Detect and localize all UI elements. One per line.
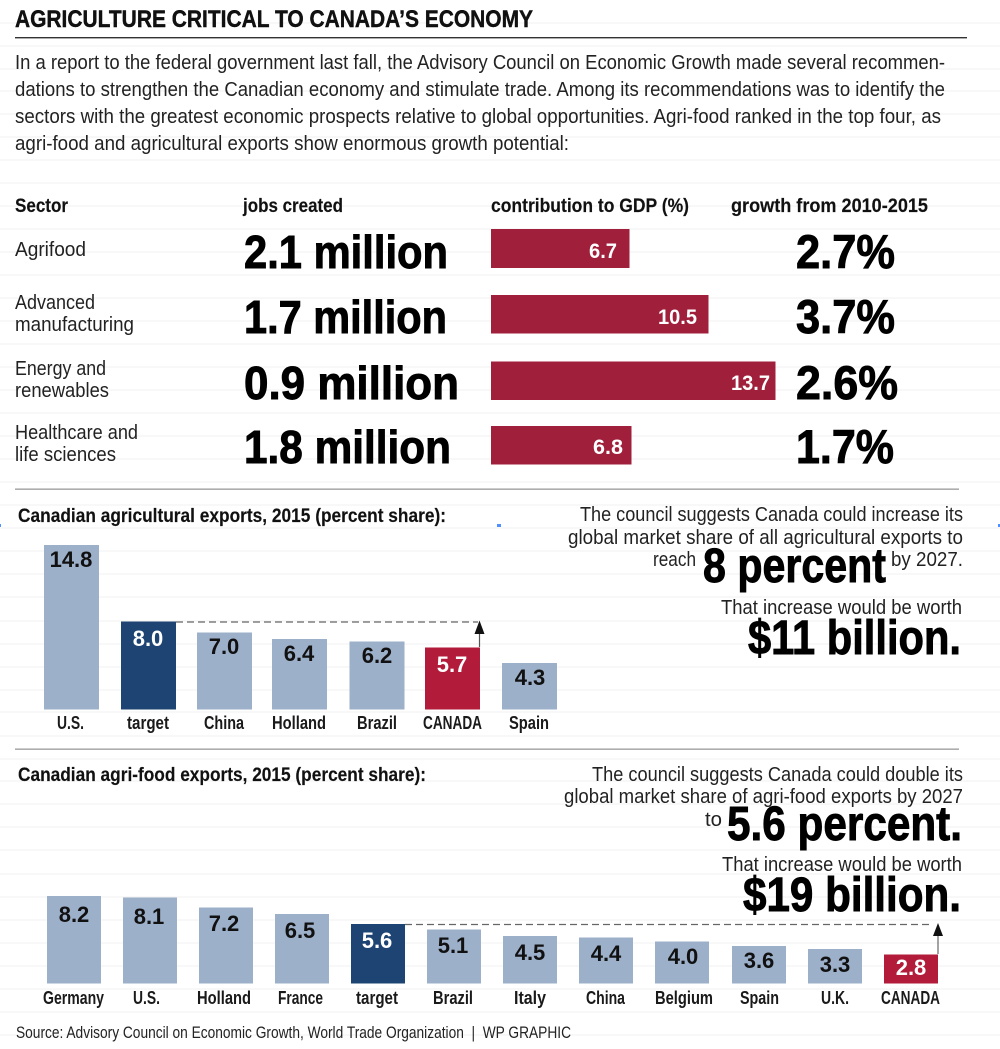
bar chart: agricultural exports: U.S. [57,713,84,733]
bar chart: agri-food exports: Belgium [655,988,713,1008]
bar chart: agricultural exports: Spain [509,713,549,733]
panel: agricultural exports [18,504,963,733]
bar chart: agri-food exports: 5.1 [438,933,468,958]
bar chart: agri-food exports: 2.8 [896,955,926,980]
bar chart: agricultural exports: Brazil [357,713,397,733]
panel: agri-food exports [18,764,963,1008]
callout: 8 percent: 8 percent [703,540,886,593]
bar chart: agricultural exports: 6.4 [284,641,315,666]
arrow: canada to target [176,620,484,647]
row: advanced manufacturing [15,290,895,343]
bar chart: agricultural exports: target [127,713,169,733]
intro text block: agri-food and agricultural exports show enormous growth potential: [15,133,569,155]
row: healthcare and life sciences: Healthcare and [15,422,138,444]
chart heading: Canadian agricultural exports, 2015 (percent share): [18,506,446,527]
callout: 8 percent: $11 billion. [748,612,961,665]
bar chart: agricultural exports: China [204,713,245,733]
row: energy and renewables: 13.7 [731,372,770,395]
bar chart: agri-food exports: 7.2 [209,911,239,936]
bar chart: agri-food exports: 6.5 [285,918,315,943]
bar chart: agri-food exports: Spain [740,988,779,1008]
row: energy and renewables: 0.9 million [244,357,459,409]
bar chart: agri-food exports: 8.1 [134,904,164,929]
callout: 8 percent: That increase would be worth [721,597,962,619]
source line: Source: Advisory Council on Economic Growth, World Trade Organization | WP GRAPHIC [16,1023,571,1042]
row: energy and renewables: 2.6% [796,356,898,409]
bar chart: agri-food exports: U.S. [133,988,160,1008]
row: agrifood: Agrifood [15,239,86,261]
row: advanced manufacturing: 3.7% [796,290,895,343]
bar chart: agricultural exports [44,545,557,733]
bar chart: agricultural exports: 4.3 [515,665,545,690]
bar chart: agri-food exports: U.K. [821,988,849,1008]
arrow: canada to target [405,923,943,954]
table column headings: contribution to GDP (%) [491,196,689,217]
chart heading: Canadian agri-food exports, 2015 (percent share): [18,765,426,786]
intro text block: In a report to the federal government last fall, the Advisory Council on Economic Growth made several recommen- [15,52,945,74]
row: energy and renewables [15,356,898,409]
row: advanced manufacturing: 10.5 [658,306,697,329]
intro text block [15,52,945,155]
table column headings: jobs created [242,196,343,217]
table column headings [15,196,928,217]
table column headings: growth from 2010-2015 [731,196,928,217]
callout: 5.6 percent [564,764,963,922]
row: agrifood [15,225,895,278]
table column headings: Sector [15,196,69,217]
bar chart: agri-food exports [43,896,940,1008]
callout: 5.6 percent: $19 billion. [743,869,961,922]
row: healthcare and life sciences: 1.8 million [244,421,451,473]
bar chart: agri-food exports: 4.0 [668,944,698,969]
row: agrifood: 6.7 [589,240,617,263]
intro text block: dations to strengthen the Canadian economy and stimulate trade. Among its recommendations was to identify the [15,79,945,101]
row: healthcare and life sciences: 6.8 [593,436,623,459]
bar chart: agri-food exports: France [278,988,323,1008]
bar chart: agri-food exports: Holland [197,988,251,1008]
bar chart: agri-food exports: CANADA [881,988,940,1008]
bar chart: agri-food exports: Italy [514,988,546,1008]
callout: 5.6 percent: 5.6 percent. [727,798,962,851]
bar chart: agricultural exports: 14.8 [50,547,92,572]
panel: sector table [15,196,928,473]
row: advanced manufacturing: Advanced [15,292,95,314]
bar chart: agricultural exports: Holland [272,713,326,733]
bar chart: agri-food exports: China [586,988,626,1008]
callout: 8 percent: by 2027. [891,549,963,571]
callout: 5.6 percent: global market share of agri-food exports by 2027 [564,786,963,808]
bar chart: agri-food exports: 4.4 [591,941,622,966]
bar chart: agricultural exports: 7.0 [209,634,239,659]
bar chart: agricultural exports: 8.0 [133,626,163,651]
row: advanced manufacturing: 1.7 million [244,291,447,343]
bar chart: agri-food exports: Germany [43,988,104,1008]
row: energy and renewables: Energy and [15,358,106,380]
row: healthcare and life sciences: life sciences [15,444,116,466]
row: healthcare and life sciences: 1.7% [796,420,894,473]
title: AGRICULTURE CRITICAL TO CANADA’S ECONOMY [15,6,533,33]
bar chart: agri-food exports: target [356,988,398,1008]
callout: 5.6 percent: That increase would be worth [722,854,962,876]
callout: 8 percent [568,504,963,665]
bar chart: agricultural exports: 5.7 [437,652,467,677]
bar chart: agricultural exports: 6.2 [362,643,392,668]
row: agrifood: 2.7% [796,225,895,278]
intro text block: sectors with the greatest economic prospects relative to global opportunities. Agri-food ranked in the top four, as [15,106,941,128]
callout: 8 percent: reach [653,549,696,571]
bar chart: agri-food exports: 4.5 [515,940,545,965]
callout: 8 percent: The council suggests Canada could increase its [580,504,963,526]
bar chart: agri-food exports: Brazil [433,988,473,1008]
bar chart: agri-food exports: 8.2 [59,902,89,927]
bar chart: agricultural exports: CANADA [423,713,482,733]
bar chart: agri-food exports: 3.6 [744,948,774,973]
callout: 5.6 percent: The council suggests Canada could double its [592,764,963,786]
callout: 8 percent: global market share of all agricultural exports to [568,527,963,549]
bar chart: agri-food exports: 3.3 [820,952,850,977]
row: healthcare and life sciences [15,420,894,473]
row: energy and renewables: renewables [15,380,109,402]
callout: 5.6 percent: to [705,809,722,831]
row: agrifood: 2.1 million [244,226,448,278]
bar chart: agri-food exports: 5.6 [362,928,392,953]
row: advanced manufacturing: manufacturing [15,314,134,336]
